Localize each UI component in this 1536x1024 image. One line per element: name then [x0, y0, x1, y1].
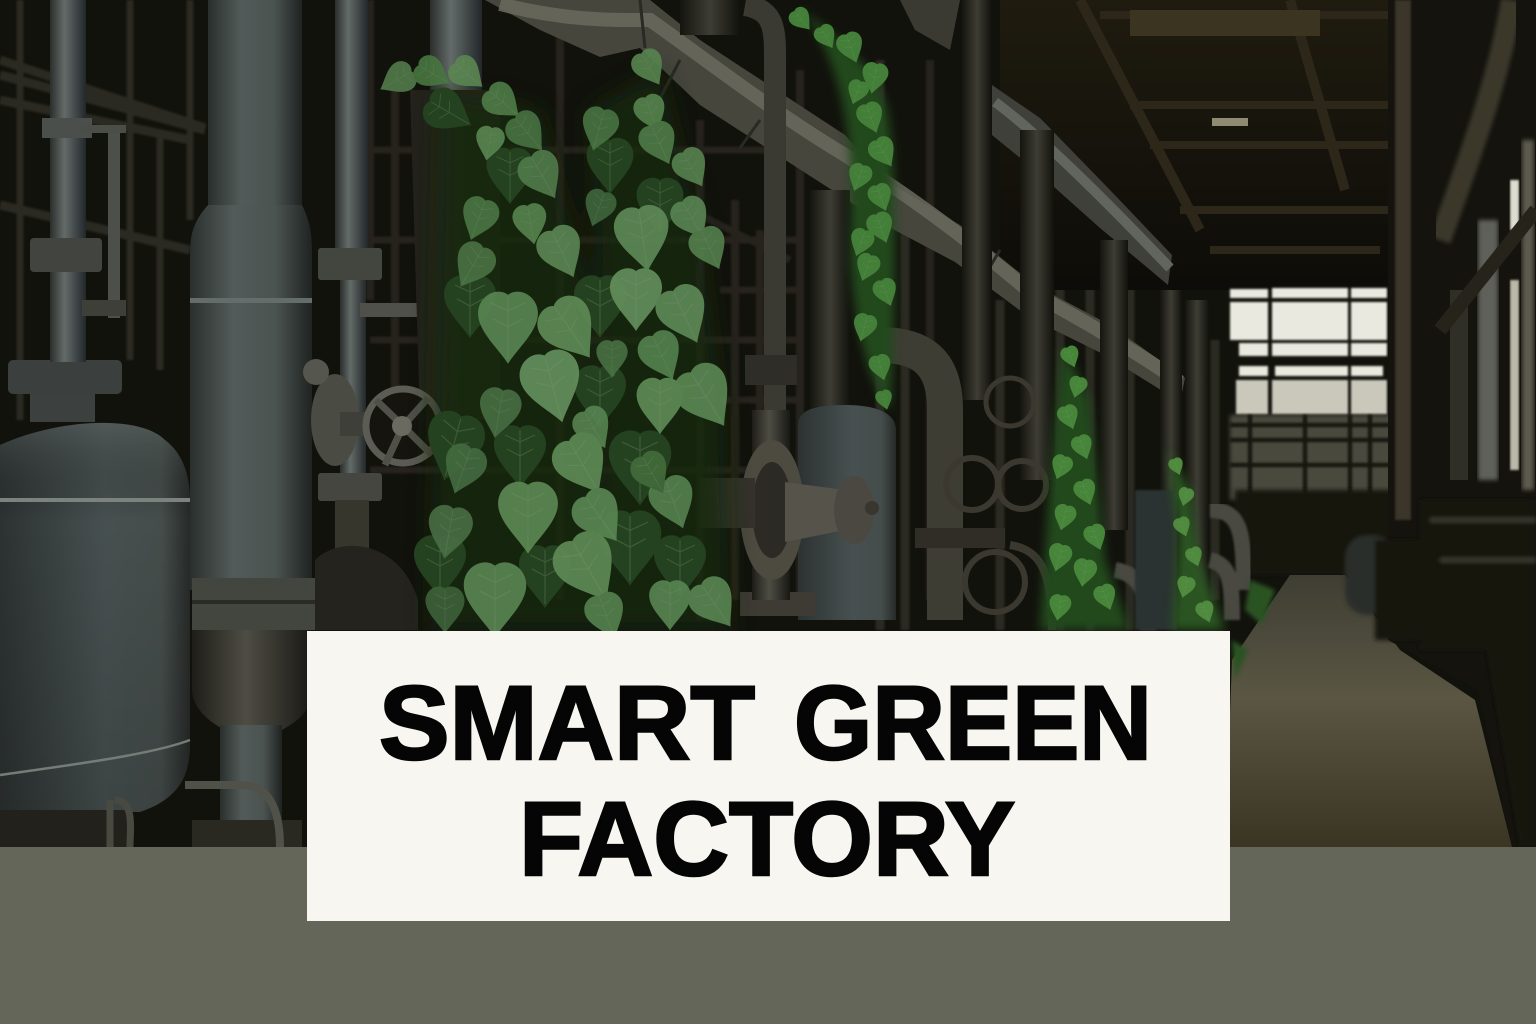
vine: main right: [576, 44, 749, 639]
valve wheels: [915, 378, 1052, 630]
right side wall: [1388, 0, 1536, 847]
ceiling beams: [1080, 0, 1536, 250]
back wall: [1230, 415, 1395, 500]
far vertical pipes: [680, 0, 1244, 630]
background: dark pipe racks: [0, 0, 1215, 630]
olive band: [0, 847, 1536, 1024]
vine: far 2: [1167, 450, 1275, 680]
thin left pipe: [30, 0, 126, 362]
valve and handwheel: [303, 359, 440, 466]
far racks: [1230, 415, 1390, 500]
corridor background: [1000, 0, 1536, 847]
green shade behind vines: [430, 70, 730, 630]
floor: [1225, 575, 1512, 847]
big diagonal pipe: [485, 0, 1185, 402]
title: line one: GREEN: [794, 665, 1152, 782]
ceiling: [1000, 0, 1536, 290]
title: line two: FACTORY: [519, 781, 1015, 898]
right foreground machinery: [1345, 500, 1536, 847]
vine: centre: [786, 4, 903, 412]
vine: main left: [372, 50, 636, 645]
title: line one: [379, 665, 1152, 782]
windows: [1230, 288, 1435, 414]
pump and vessel: [700, 355, 896, 620]
left vessel: [0, 360, 190, 847]
title panel: [307, 631, 1230, 921]
title: line one: SMART: [379, 665, 755, 782]
main column: [185, 0, 337, 847]
vine: far 1: [1040, 344, 1130, 630]
vine: dark back leaves: [414, 82, 706, 608]
second pipe with flanges: [315, 0, 500, 630]
